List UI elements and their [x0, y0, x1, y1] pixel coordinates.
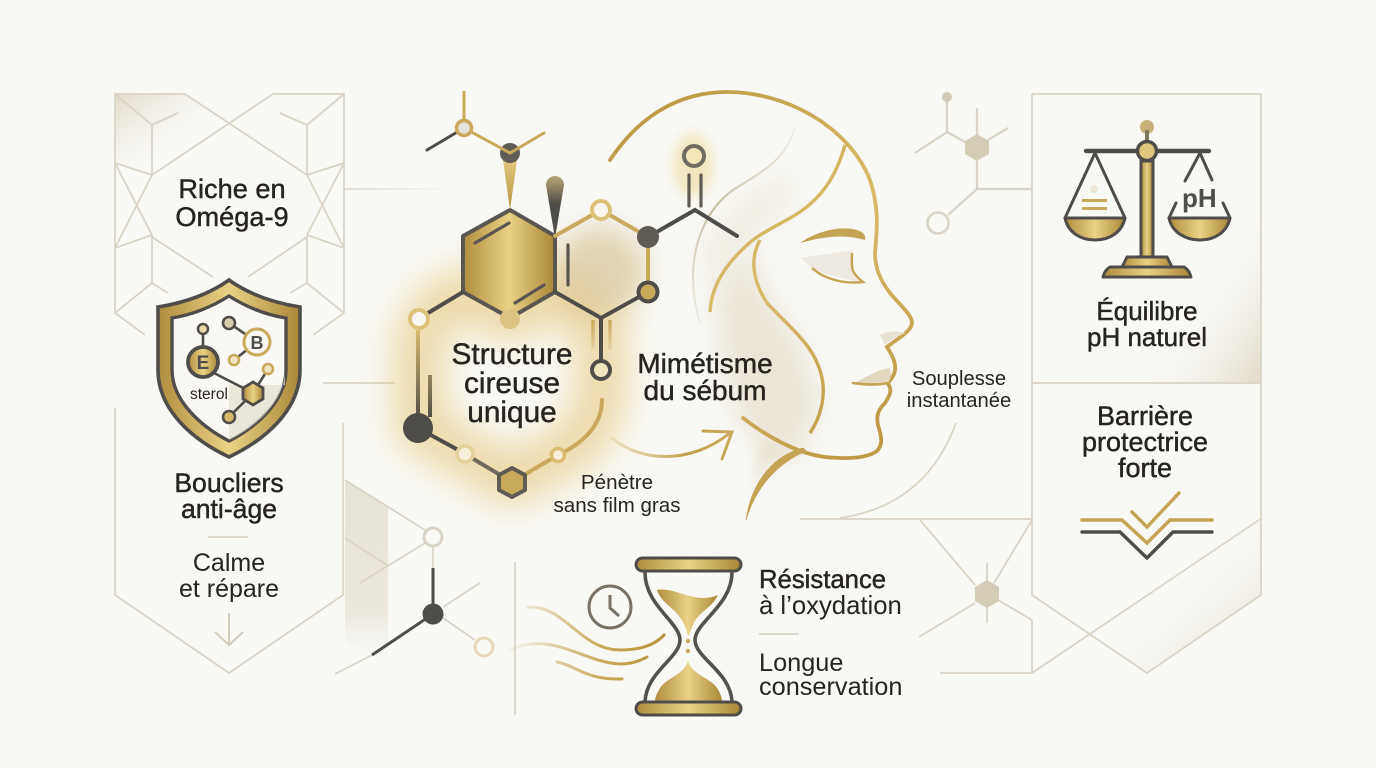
text: Souplesse instantanée: instantanée — [907, 390, 1011, 412]
icon: shield — [158, 280, 300, 457]
panel shading: top left — [115, 94, 228, 175]
panel: right column — [1032, 94, 1262, 673]
nose and lips — [880, 331, 905, 345]
heading: Barrière protectrice forte: forte — [1118, 453, 1172, 483]
text: Résistance à l’oxydation: à l’oxydation — [759, 592, 902, 620]
heading: Structure cireuse unique: unique — [467, 396, 557, 429]
text: Pénètre sans film gras: Pénètre — [581, 471, 653, 494]
heading: Mimétisme du sébum: du sébum — [644, 375, 766, 406]
molecule: central glow — [419, 133, 713, 482]
text: Calme et répare: et répare — [179, 575, 279, 603]
curve and connectors lower right — [800, 423, 1032, 519]
text: Résistance à l’oxydation: Résistance — [759, 566, 886, 594]
connector lines — [344, 188, 437, 190]
icon: vitamin E node: E — [197, 353, 209, 374]
arrow: down — [215, 613, 243, 645]
hexagon: gold ring — [463, 210, 555, 318]
heading: Structure cireuse unique: Structure — [452, 338, 572, 371]
illustration: woman's profile — [610, 92, 912, 520]
molecule: lower left — [335, 480, 493, 674]
wedge bonds — [503, 160, 517, 210]
panel: geometric frame, upper — [115, 94, 344, 335]
molecule: upper right — [915, 92, 1032, 234]
head shading — [715, 240, 820, 465]
heading: Barrière protectrice forte: Barrière — [1097, 401, 1193, 431]
heading: Boucliers anti-âge: Boucliers — [174, 468, 284, 498]
icon: clock — [589, 586, 631, 628]
molecule: central structure — [403, 92, 737, 497]
heading: Riche en Oméga-9: Riche en — [178, 173, 286, 204]
text: Souplesse instantanée: Souplesse — [912, 368, 1006, 390]
panel shading — [1090, 518, 1262, 673]
panel: left column — [115, 94, 344, 673]
outline: hairline — [710, 145, 845, 312]
icon: barrier chevrons — [1082, 493, 1212, 558]
ketone group — [689, 175, 701, 206]
text: Longue conservation: conservation — [759, 673, 902, 701]
molecule: top branch — [464, 92, 544, 153]
icon: vitamin B node: B — [250, 333, 264, 353]
node: lower hexagon vertex — [500, 309, 520, 329]
text: Calme et répare: Calme — [193, 549, 265, 577]
heading: Équilibre pH naturel: Équilibre — [1096, 296, 1198, 326]
text: Pénètre sans film gras: sans film gras — [553, 494, 681, 517]
heading: Barrière protectrice forte: protectrice — [1082, 427, 1208, 457]
heading: Structure cireuse unique: cireuse — [464, 367, 560, 400]
heading: Équilibre pH naturel: pH naturel — [1087, 322, 1207, 352]
panel frame — [1032, 94, 1261, 673]
icon: pH scale — [1065, 120, 1230, 277]
heading: Mimétisme du sébum: Mimétisme — [637, 348, 773, 379]
icon: hourglass — [636, 558, 741, 715]
outline: neck — [746, 448, 806, 520]
eye — [800, 250, 863, 282]
label: sterol: sterol — [190, 386, 228, 403]
panel: geometric frame, lower — [115, 408, 343, 673]
arrow: penetration curve — [612, 431, 732, 459]
heading: Riche en Oméga-9: Oméga-9 — [175, 201, 289, 232]
outline: jaw and nape — [754, 240, 823, 433]
text: Longue conservation: Longue — [759, 649, 843, 677]
label: pH: pH — [1182, 183, 1217, 213]
outline: crown and face — [610, 92, 912, 458]
icon: vitamin B node — [244, 329, 270, 355]
molecule: lower right — [919, 518, 1262, 673]
molecule: second ring — [555, 210, 648, 292]
eyebrow — [800, 228, 865, 243]
molecule: lower chain — [428, 292, 463, 313]
heading: Boucliers anti-âge: anti-âge — [181, 494, 277, 524]
hair line: thin — [693, 128, 795, 323]
icon: vitamin E node — [188, 347, 218, 377]
icon: oxidation waves and clock — [510, 586, 664, 679]
